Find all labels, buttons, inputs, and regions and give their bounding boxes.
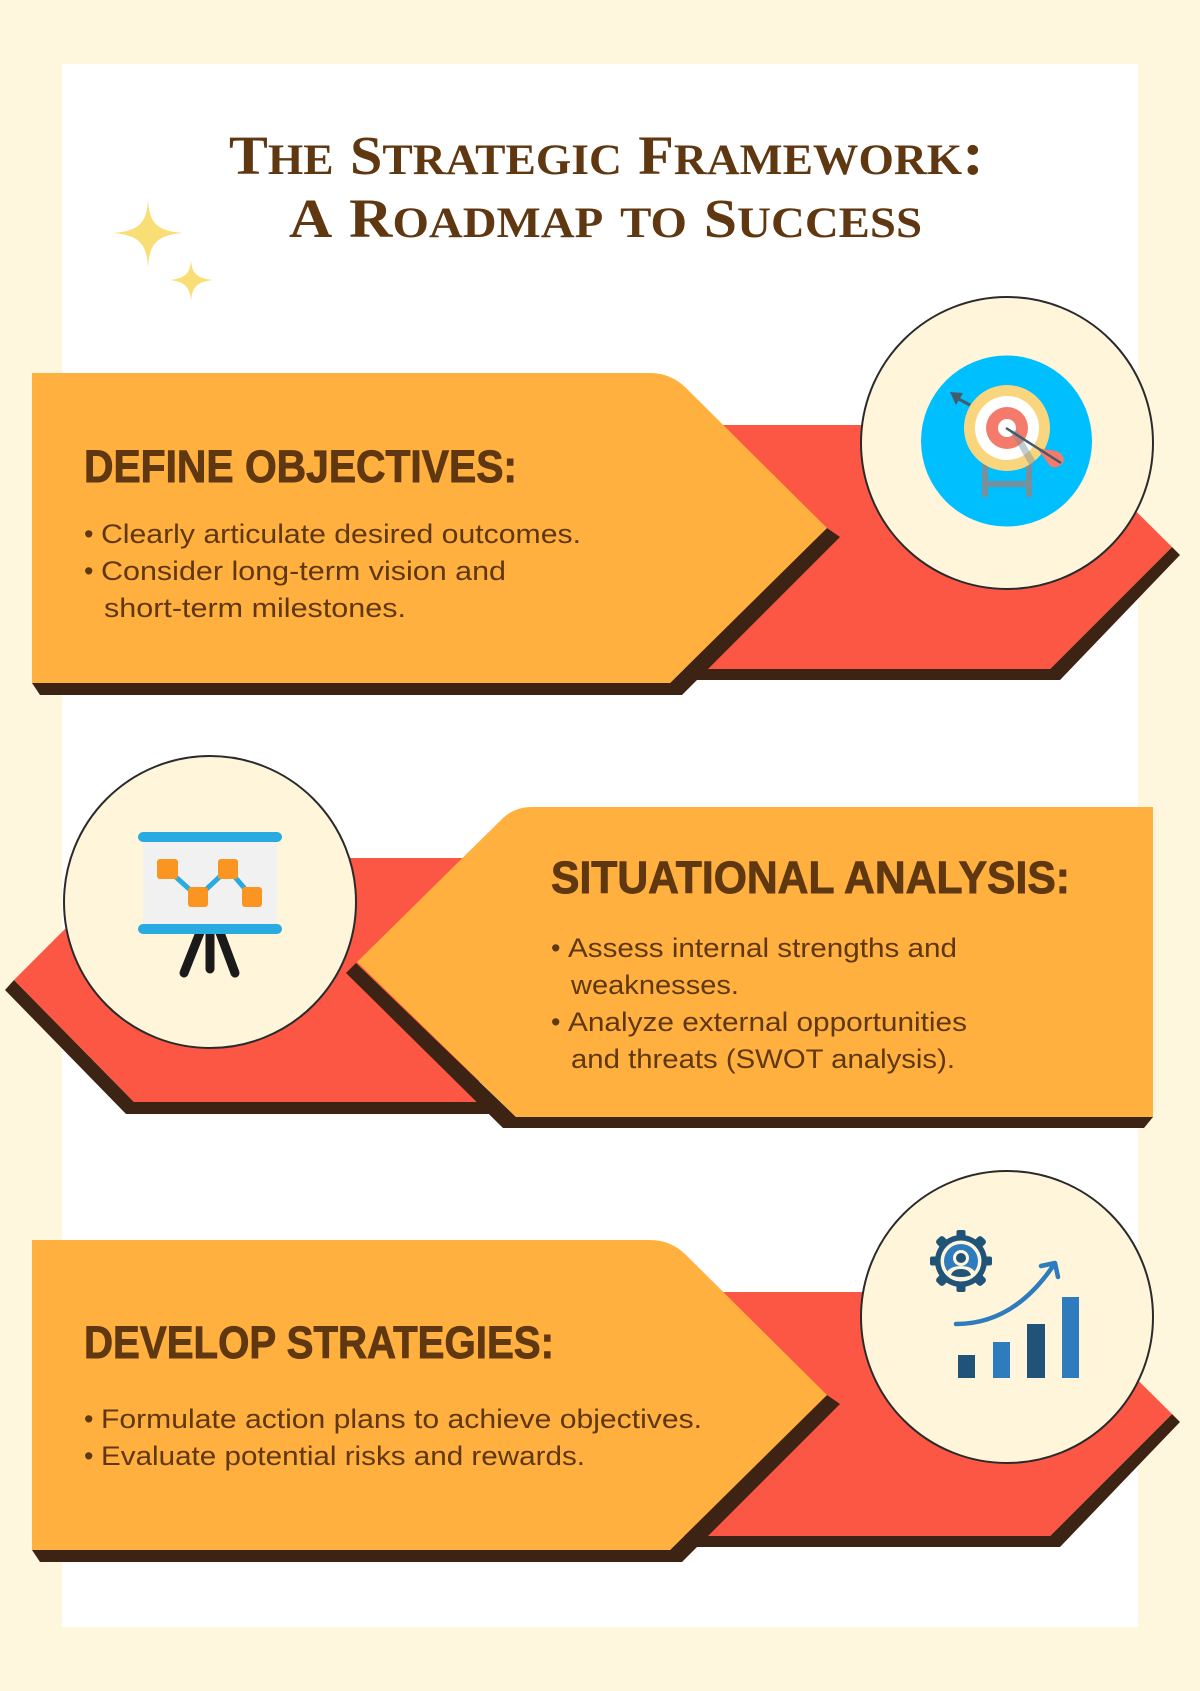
icon: gear with person — [930, 1230, 992, 1292]
panel: develop strategies — [32, 1171, 1180, 1562]
title: The Strategic Framework: — [229, 120, 984, 188]
heading: DEVELOP STRATEGIES: — [84, 1317, 554, 1368]
bullet list: Consider long-term vision and — [101, 556, 506, 586]
bullet list: Formulate action plans to achieve objectives. — [101, 1404, 702, 1434]
icon circle — [861, 297, 1153, 589]
bullet list: • — [551, 1007, 560, 1037]
icon circle — [64, 756, 356, 1048]
icon circle — [861, 1171, 1153, 1463]
panel: situational analysis — [5, 756, 1153, 1128]
orange arrow card — [32, 373, 840, 695]
icon: presentation board — [138, 832, 282, 973]
orange arrow card — [346, 807, 1153, 1128]
bullet list: • — [84, 1441, 93, 1471]
red arrow band — [650, 1292, 1180, 1547]
bullet list — [84, 1404, 702, 1471]
bullet list: • — [551, 933, 560, 963]
bullet list — [84, 519, 581, 623]
bullet list: • — [84, 556, 93, 586]
icon: target with arrow — [921, 356, 1092, 526]
bullet list: and threats (SWOT analysis). — [571, 1044, 955, 1074]
bullet list: short-term milestones. — [104, 593, 406, 623]
bullet list: Analyze external opportunities — [568, 1007, 967, 1037]
bullet list: Assess internal strengths and — [568, 933, 957, 963]
panel: define objectives — [32, 297, 1180, 695]
bullet list: • — [84, 1404, 93, 1434]
bullet list: Clearly articulate desired outcomes. — [101, 519, 581, 549]
icon: sparkle stars — [113, 199, 213, 301]
title: A Roadmap to Success — [289, 183, 922, 251]
red arrow band — [650, 425, 1180, 680]
heading: SITUATIONAL ANALYSIS: — [551, 852, 1070, 903]
icon: growth bar chart with arrow — [956, 1263, 1079, 1378]
orange arrow card — [32, 1240, 840, 1562]
title — [229, 120, 984, 251]
bullet list: weaknesses. — [570, 970, 739, 1000]
bullet list: • — [84, 519, 93, 549]
bullet list — [551, 933, 967, 1074]
red arrow band — [5, 858, 490, 1114]
heading: DEFINE OBJECTIVES: — [84, 441, 517, 492]
bullet list: Evaluate potential risks and rewards. — [101, 1441, 585, 1471]
